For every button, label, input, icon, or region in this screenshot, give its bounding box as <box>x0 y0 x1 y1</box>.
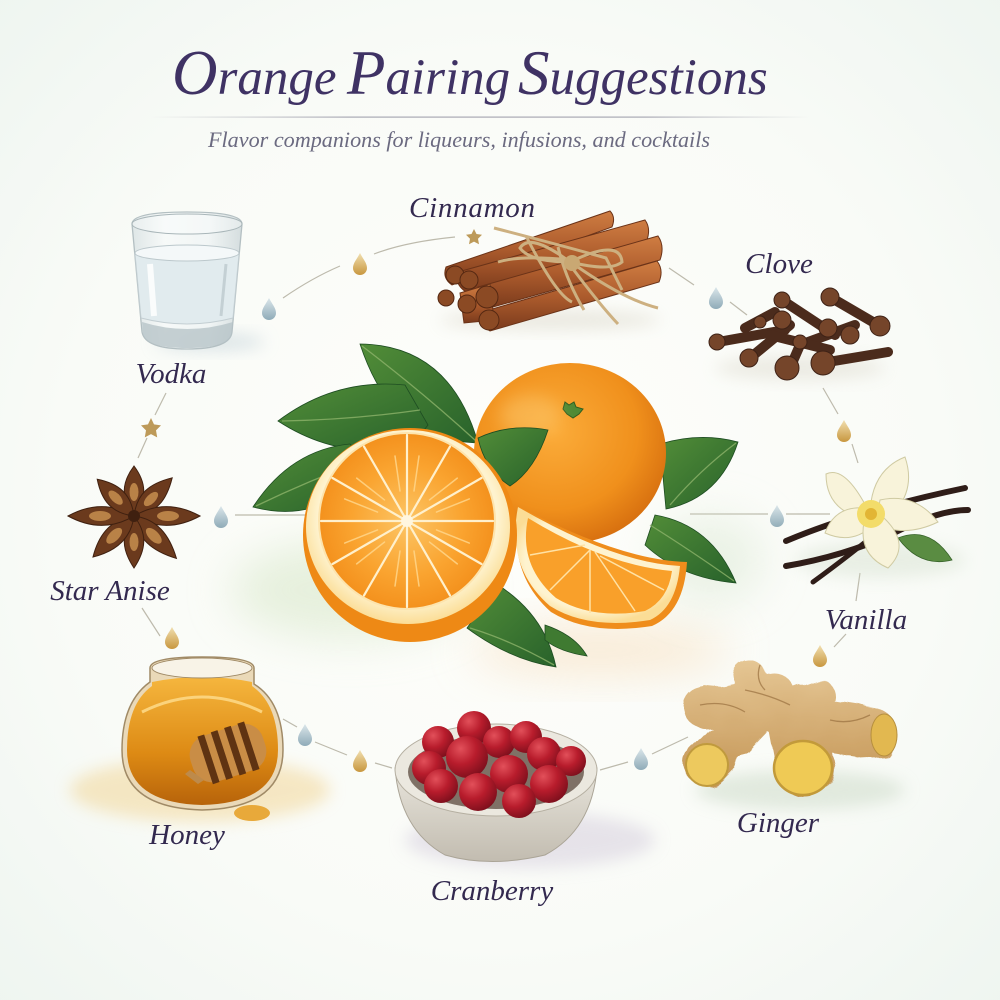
central orange composition <box>230 344 765 676</box>
honey dipper <box>184 717 272 789</box>
icon: vodka glass <box>132 212 265 351</box>
title: range <box>218 50 336 106</box>
title: O <box>172 38 218 108</box>
half-cut orange <box>303 428 517 642</box>
label: Honey: Honey <box>148 819 225 851</box>
label: Vanilla: Vanilla <box>825 604 907 636</box>
title: uggestions <box>550 50 768 106</box>
orange wedge <box>515 507 687 629</box>
whole orange <box>474 363 666 543</box>
title: airing <box>385 50 510 106</box>
water and honey drops <box>165 253 851 772</box>
icon: star anise <box>68 466 200 568</box>
leaves behind <box>253 344 738 667</box>
subtitle: Flavor companions for liqueurs, infusions, and cocktails <box>207 127 710 152</box>
label: Cranberry: Cranberry <box>431 875 553 907</box>
connecting ring <box>138 237 860 770</box>
icon: cinnamon sticks <box>438 211 662 331</box>
icon: cranberry bowl <box>395 711 655 868</box>
watercolor shadow <box>230 515 765 676</box>
label: Vodka: Vodka <box>136 358 206 390</box>
label: Star Anise: Star Anise <box>50 575 170 607</box>
icon: vanilla flower and pods <box>786 457 968 582</box>
label: Cinnamon: Cinnamon <box>409 192 535 224</box>
title: S <box>518 38 550 108</box>
label: Clove: Clove <box>745 248 813 280</box>
icon: stars <box>141 229 482 437</box>
title: P <box>346 38 385 108</box>
icon: ginger root <box>686 665 905 810</box>
icon: honey jar <box>70 657 330 822</box>
leaf over oranges <box>478 428 548 486</box>
icon: clove pile <box>709 288 890 380</box>
label: Ginger: Ginger <box>737 807 820 839</box>
